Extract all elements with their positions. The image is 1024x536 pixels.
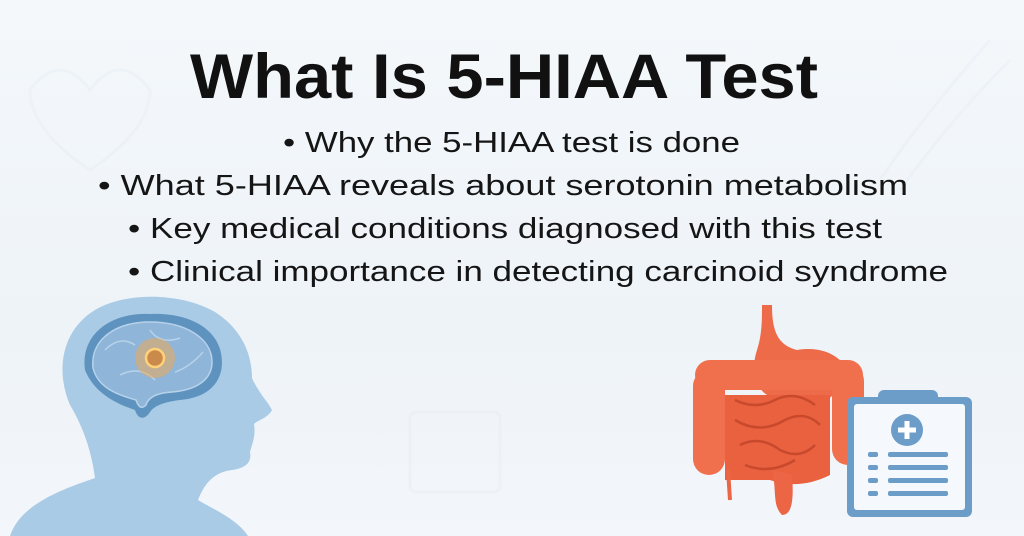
bullet list: • Why the 5-HIAA test is done xyxy=(283,127,740,159)
title: What Is 5-HIAA Test xyxy=(190,42,818,112)
bullet list: • Key medical conditions diagnosed with this test xyxy=(128,213,882,245)
bullet list: • What 5-HIAA reveals about serotonin metabolism xyxy=(98,170,908,202)
illustration: head with brain xyxy=(10,297,272,536)
icon: clipboard xyxy=(847,390,972,517)
bullet list: • Clinical importance in detecting carcinoid syndrome xyxy=(128,256,948,288)
bullet list xyxy=(98,127,948,288)
illustration: digestive system xyxy=(693,305,864,515)
brain xyxy=(84,314,222,418)
